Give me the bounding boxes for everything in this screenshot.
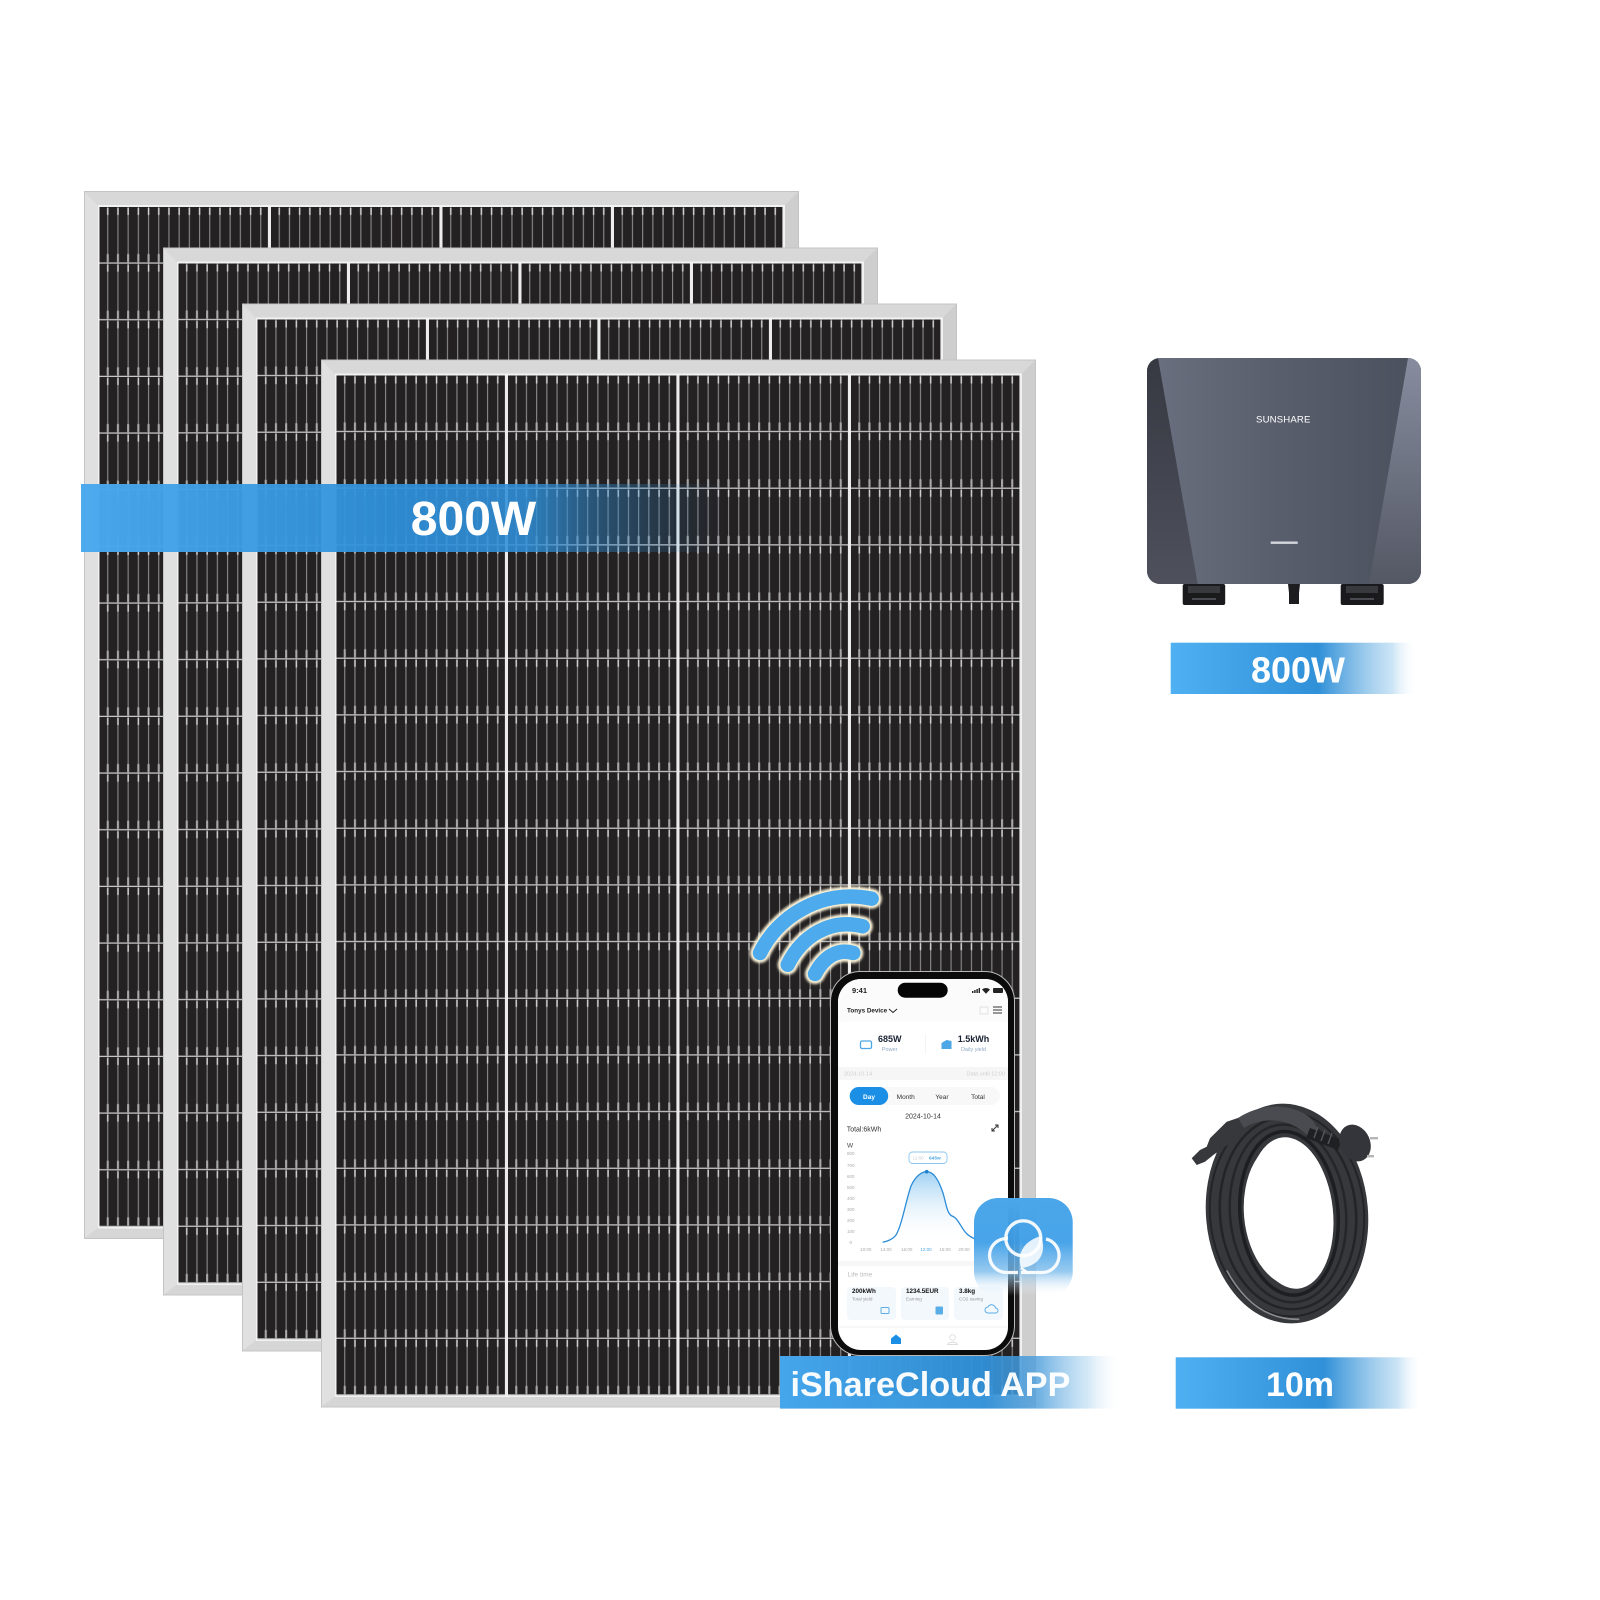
solar panel 3 <box>242 304 957 1352</box>
strip date: 2024-10-14 <box>844 1072 872 1078</box>
area under curve <box>883 1172 976 1242</box>
x axis labels: 15:00 <box>939 1247 951 1252</box>
inverter label bar <box>1171 643 1417 694</box>
x axis labels <box>860 1247 970 1252</box>
y axis labels: 600 <box>847 1174 855 1179</box>
stat card: yield <box>847 1287 896 1320</box>
y axis labels <box>847 1151 855 1245</box>
chart date: 2024-10-14 <box>905 1114 941 1120</box>
icon: expand <box>992 1125 998 1131</box>
strip note: Data until 12:00 <box>966 1072 1005 1078</box>
solar panel 2 <box>163 248 878 1296</box>
yield icon <box>881 1308 889 1314</box>
icon: home <box>891 1334 901 1344</box>
icon: power <box>860 1041 872 1048</box>
stat card: earning <box>901 1287 949 1320</box>
app label text: iShareCloud APP <box>790 1366 1070 1404</box>
tab labels: Year <box>935 1094 949 1101</box>
stat card: CO2 <box>954 1287 1003 1320</box>
status time: 9:41 <box>852 986 867 995</box>
chevron <box>889 1009 897 1012</box>
earning total: 1234.5EUR <box>906 1288 939 1295</box>
yield value: 1.5kWh <box>958 1034 989 1044</box>
inverter connectors <box>1183 584 1384 605</box>
phone screen <box>838 979 1008 1350</box>
earning icon <box>936 1306 943 1314</box>
coil opening <box>1240 1133 1341 1293</box>
app label bar <box>780 1356 1122 1409</box>
life time section <box>847 1272 1003 1320</box>
y axis labels: 500 <box>847 1185 855 1190</box>
banner text: 800W: 800W <box>411 493 537 546</box>
tab labels: Month <box>897 1094 915 1101</box>
brand name: SUNSHARE <box>1256 414 1311 426</box>
cable coil <box>1192 1104 1378 1326</box>
tooltip <box>909 1152 947 1164</box>
tooltip value: 645w <box>929 1156 941 1162</box>
peak marker <box>925 1170 928 1173</box>
y axis labels: 100 <box>847 1229 855 1234</box>
y axis labels: 700 <box>847 1163 855 1168</box>
active tab <box>850 1087 888 1105</box>
inverter <box>1147 358 1421 605</box>
inverter side wings <box>1147 358 1421 584</box>
solar panel 4 (front) <box>321 360 1036 1408</box>
yield label: Total yield <box>852 1296 873 1302</box>
status icons <box>972 988 1003 994</box>
x axis labels: 14:00 <box>880 1247 892 1252</box>
x axis labels: 10:00 <box>860 1247 872 1252</box>
earning label: Earning <box>906 1296 922 1302</box>
section divider <box>838 1261 1008 1266</box>
divider <box>924 1034 927 1054</box>
y axis labels: 200 <box>847 1218 855 1223</box>
icon: wifi signal <box>760 897 872 974</box>
dynamic island <box>898 983 948 998</box>
inverter label text: 800W <box>1251 650 1345 691</box>
yield caption: Daily yield <box>961 1047 986 1053</box>
nav divider <box>838 1326 1008 1328</box>
y axis labels: 800 <box>847 1151 855 1156</box>
yield total: 200kWh <box>852 1288 876 1295</box>
icon: daily yield <box>942 1040 952 1049</box>
left connector <box>1192 1106 1318 1165</box>
date strip <box>838 1067 1008 1080</box>
CO2 icon <box>985 1305 998 1313</box>
cloud logo <box>990 1221 1059 1273</box>
CO2 label: CO2 saving <box>959 1296 983 1302</box>
section title: Life time <box>848 1272 873 1278</box>
solar panel 1 (back) <box>84 191 799 1239</box>
icon: profile <box>948 1335 958 1344</box>
y axis labels: 300 <box>847 1207 855 1212</box>
tooltip time: 12:00 <box>912 1156 924 1161</box>
CO2 total: 3.8kg <box>959 1288 975 1295</box>
panel power banner <box>81 484 725 552</box>
chart total: Total:6kWh <box>847 1126 881 1134</box>
tab labels <box>863 1094 985 1101</box>
cable label text: 10m <box>1266 1366 1334 1404</box>
device name: Tonys Device <box>847 1008 888 1014</box>
x axis labels: 12:00 <box>920 1247 932 1252</box>
menu icons <box>980 1007 1002 1014</box>
inverter body <box>1147 358 1421 584</box>
coil rings <box>1201 1104 1373 1326</box>
y axis labels: 400 <box>847 1196 855 1201</box>
header background <box>838 979 1008 1022</box>
period tabs <box>850 1087 1000 1105</box>
power caption: Power <box>882 1047 898 1053</box>
power chart <box>847 1142 976 1252</box>
power summary card <box>841 1022 1005 1067</box>
tab labels: Day <box>863 1094 875 1101</box>
power curve <box>883 1172 976 1242</box>
wall plug <box>1306 1119 1378 1167</box>
tab labels: Total <box>971 1094 985 1101</box>
app icon: iShareCloud <box>974 1198 1073 1296</box>
status light <box>1271 542 1298 544</box>
x axis labels: 20:00 <box>958 1247 970 1252</box>
x axis labels: 16:00 <box>901 1247 913 1252</box>
phone body <box>830 972 1014 1356</box>
phone with iShareCloud app screen <box>830 972 1014 1356</box>
cable label bar <box>1176 1357 1423 1409</box>
chart unit: W <box>847 1142 854 1150</box>
power value: 685W <box>878 1034 902 1044</box>
y axis labels: 0 <box>849 1240 852 1245</box>
